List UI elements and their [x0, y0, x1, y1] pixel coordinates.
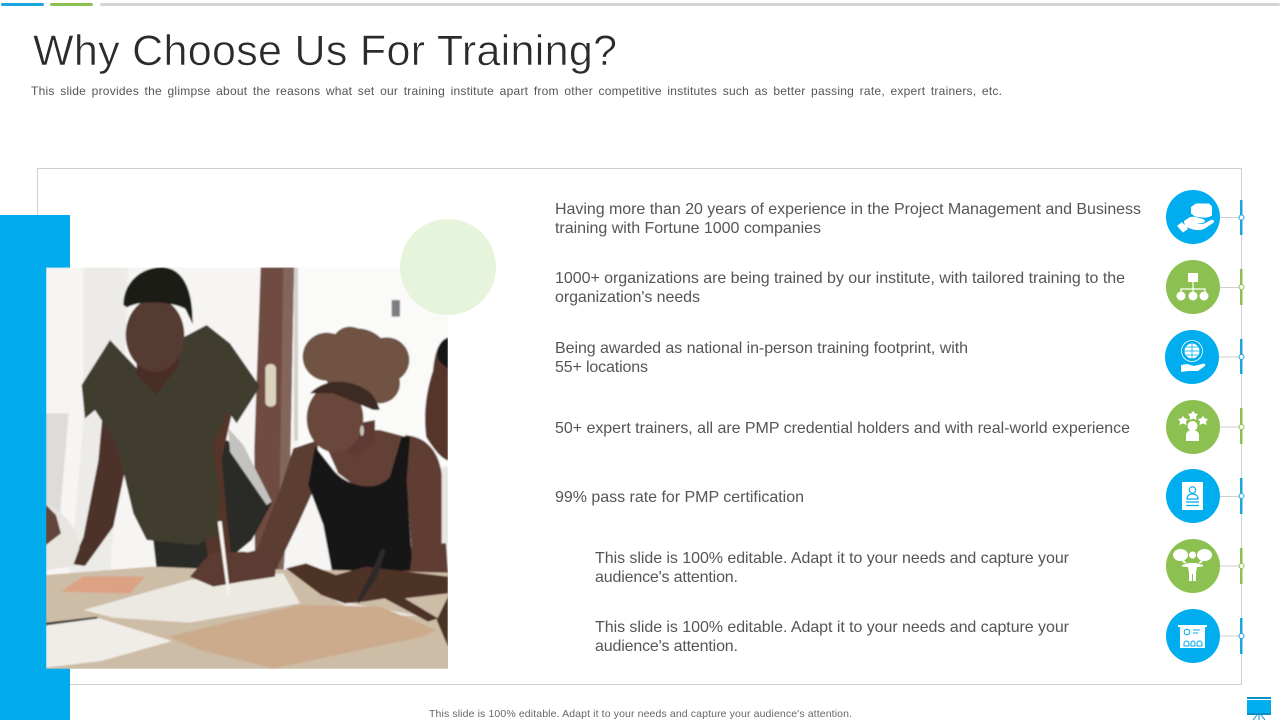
- point 7 text: [595, 619, 1070, 655]
- hands and pens: [190, 552, 277, 587]
- woman 2: chest and tank top: [328, 429, 405, 488]
- point 5 text: 99% pass rate for PMP certification: [555, 489, 804, 506]
- point 2 text: [555, 270, 1125, 306]
- photo: training session: [46, 267, 448, 669]
- point 2 text: organization's needs: [555, 289, 700, 306]
- blue side block: [0, 215, 70, 720]
- decorative green circle: [400, 219, 496, 315]
- point 7 text: This slide is 100% editable. Adapt it to your needs and capture your: [595, 619, 1070, 636]
- point 1 text: [555, 201, 1141, 237]
- icon: person with stars: [1166, 400, 1244, 454]
- top accent bars: [1, 3, 1280, 6]
- point 1 text: Having more than 20 years of experience in the Project Management and Business: [555, 201, 1141, 218]
- woman 1: head: [136, 358, 180, 394]
- woman 3: [425, 337, 448, 461]
- icon: globe in hand: [1165, 330, 1244, 384]
- content frame: [38, 168, 1242, 684]
- icon: organisation chart: [1166, 260, 1244, 314]
- table: [46, 566, 448, 669]
- woman 1: shirt: [82, 325, 260, 545]
- title: Why Choose Us For Training?: [33, 27, 617, 75]
- point 3 text: 55+ locations: [555, 359, 648, 376]
- point 3 text: [555, 340, 968, 376]
- point 3 text: Being awarded as national in-person training footprint, with: [555, 340, 968, 357]
- woman 1: arms: [72, 420, 126, 567]
- woman 1: pants and back: [152, 440, 272, 570]
- point 2 text: 1000+ organizations are being trained by our institute, with tailored training to the: [555, 270, 1125, 287]
- point 6 text: This slide is 100% editable. Adapt it to your needs and capture your: [595, 550, 1070, 567]
- point 1 text: training with Fortune 1000 companies: [555, 220, 821, 237]
- woman 2: head and hair: [362, 419, 376, 432]
- subtitle: This slide provides the glimpse about the reasons what set our training institute apart from other competitive institutes such as better passing rate, expert trainers, etc.: [31, 84, 1002, 98]
- woman 2: arms: [247, 440, 319, 568]
- icon: presentation screen logo: [1247, 697, 1271, 720]
- icon: speaker with speech bubbles: [1166, 539, 1244, 593]
- icon: credential card: [1166, 469, 1244, 523]
- footer note: This slide is 100% editable. Adapt it to your needs and capture your audience's attention.: [429, 708, 852, 720]
- point 6 text: audience's attention.: [595, 569, 738, 586]
- point 6 text: [595, 550, 1070, 586]
- icon: hand holding box: [1166, 190, 1244, 244]
- point 4 text: 50+ expert trainers, all are PMP credential holders and with real-world experience: [555, 420, 1130, 437]
- icon: classroom presentation board: [1166, 609, 1244, 663]
- point 7 text: audience's attention.: [595, 638, 738, 655]
- seated figure at left: [46, 505, 79, 570]
